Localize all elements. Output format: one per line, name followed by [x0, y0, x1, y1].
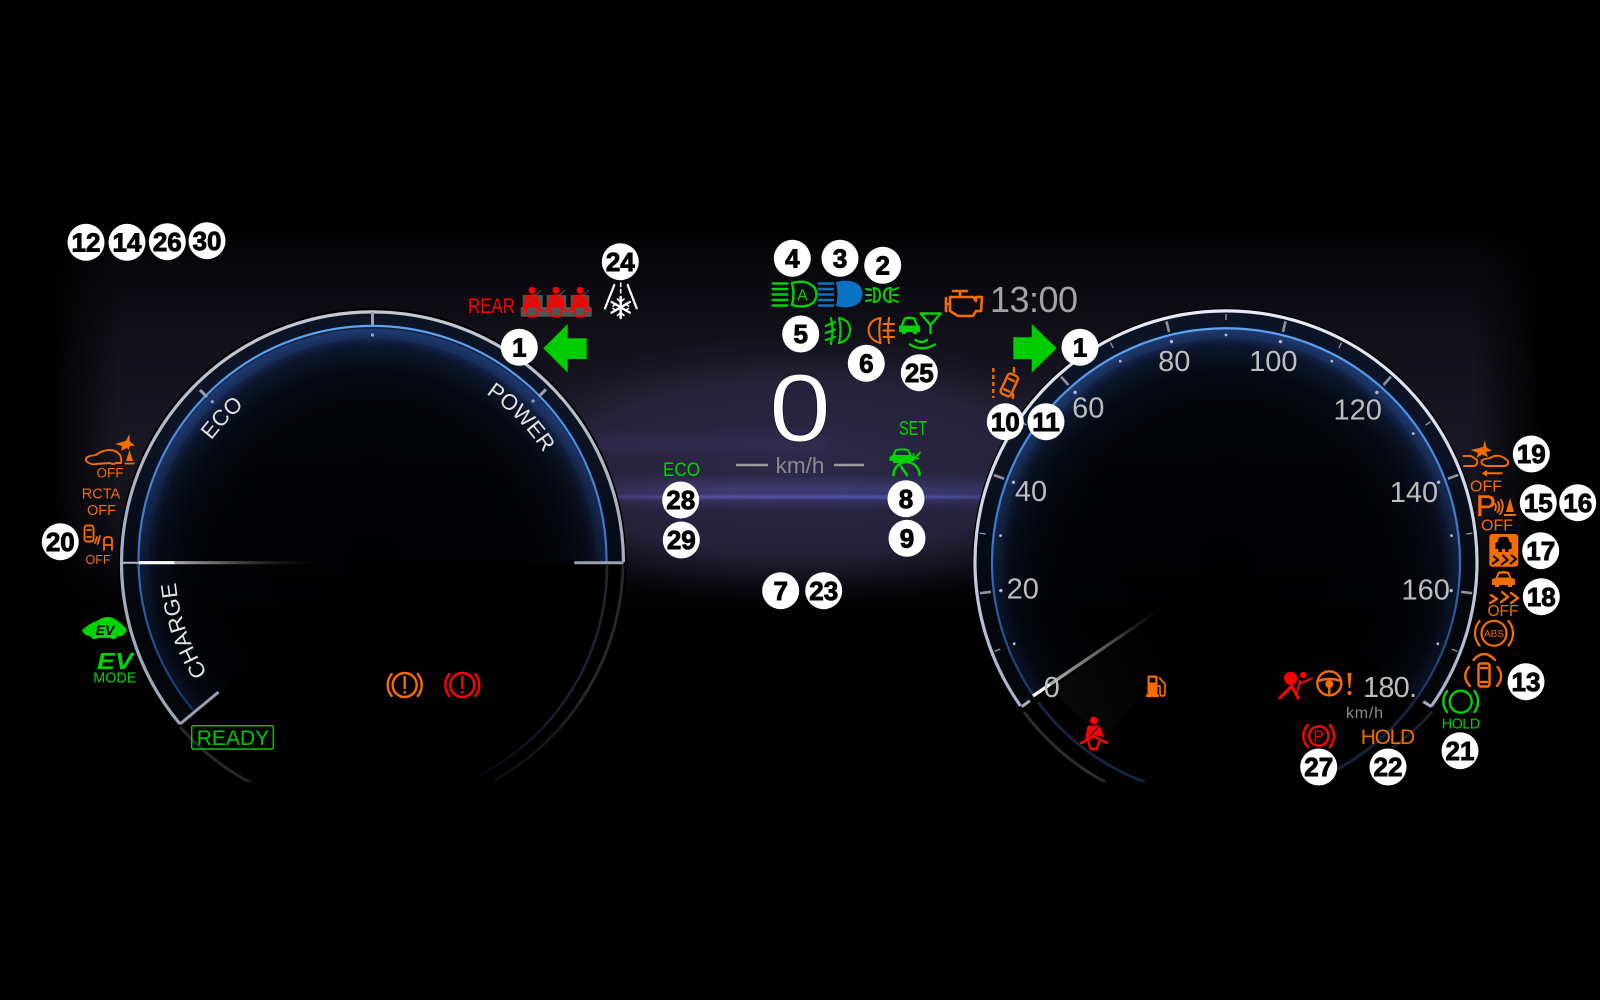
indicator: ECO mode: ECO	[663, 460, 700, 481]
minor ticks	[980, 314, 1472, 651]
icon: car link antenna	[899, 314, 940, 348]
icon: traction control off	[1488, 571, 1518, 620]
icon: auto high beam	[773, 282, 816, 306]
indicator: RCTA OFF: OFF	[87, 503, 116, 519]
icon: lane departure	[993, 368, 1019, 398]
icon: parking sensor off: P	[1476, 490, 1496, 523]
icon: rear cross traffic off	[84, 526, 112, 567]
speed scale numbers: 180.	[1363, 672, 1417, 704]
icon: driver seatbelt	[1081, 717, 1107, 749]
indicator: RCTA OFF	[82, 486, 121, 519]
icon: check engine	[946, 291, 982, 316]
callout badges: 12	[72, 228, 100, 258]
indicator: EV MODE: EV	[97, 648, 135, 674]
right gauge blue ring	[992, 328, 1460, 696]
icon: pre-collision off (right): OFF	[1470, 479, 1502, 496]
callout badges: 15	[1524, 488, 1553, 518]
right speed gauge	[970, 308, 1480, 816]
callout badges: 13	[1512, 667, 1540, 697]
icon: traction control off: OFF	[1488, 603, 1518, 620]
icon: rear fog light	[868, 318, 894, 343]
left gauge needle	[121, 562, 320, 564]
digital speed: 0	[769, 355, 831, 462]
icon: front fog light	[826, 318, 850, 344]
callout badges: 1	[512, 332, 527, 362]
icon: parking brake: P	[1314, 728, 1324, 746]
speed scale numbers: 20	[1007, 573, 1039, 605]
callout badges: 9	[900, 524, 914, 554]
left gauge outer ring	[122, 312, 623, 724]
icon: side lights	[866, 288, 898, 302]
speed scale numbers: 80	[1158, 346, 1190, 378]
callout badges: 23	[809, 576, 838, 606]
icon: skid warning	[1489, 534, 1518, 567]
left gauge lower dim arcs	[180, 565, 623, 785]
speed needle	[1033, 606, 1165, 696]
icon: auto high beam: A	[797, 288, 808, 304]
icon: pre-collision off (right)	[1464, 440, 1508, 496]
label: CHARGE: CHARGE	[160, 583, 204, 678]
callout badges: 28	[666, 485, 695, 515]
speed scale numbers: 160	[1402, 574, 1450, 606]
callout badges: 16	[1563, 488, 1592, 518]
speed unit: km/h	[776, 453, 824, 478]
callout badges: 30	[193, 226, 221, 256]
label: ECO: ECO	[200, 398, 240, 439]
icon: pre-collision off (left)	[86, 434, 135, 480]
callout badges: 4	[785, 244, 800, 274]
label: POWER: POWER	[488, 382, 554, 452]
icon: blind spot	[1465, 654, 1501, 686]
needle shadow wedge	[1050, 606, 1175, 740]
icon: high beam	[818, 281, 862, 307]
callout badges: 1	[1073, 332, 1087, 362]
speed scale numbers: 100	[1249, 346, 1297, 378]
clock: 13:00	[990, 279, 1078, 320]
callout badges: 5	[793, 319, 808, 349]
icon: brake hold green: HOLD	[1442, 716, 1480, 732]
icon: EV indicator	[82, 617, 127, 639]
icon: airbag	[1280, 672, 1312, 698]
icon: brake warning amber	[388, 673, 422, 697]
icon: parking sensor off	[1476, 490, 1516, 534]
speed scale numbers: 140	[1390, 477, 1438, 509]
callout badges: 26	[153, 227, 182, 257]
callout badges: 2	[875, 250, 890, 280]
scale dots	[999, 334, 1453, 646]
callout badges: 14	[113, 228, 142, 258]
icon: ABS: ABS	[1484, 629, 1504, 640]
icon: pre-collision off (left): OFF	[96, 466, 124, 480]
right gauge end ticks	[1022, 701, 1432, 707]
km/h scale unit: km/h	[1346, 705, 1383, 722]
callout badges: 25	[905, 358, 934, 388]
indicator: EV MODE: MODE	[93, 670, 136, 686]
icon: ABS	[1475, 621, 1513, 646]
speed scale numbers: 60	[1072, 392, 1104, 424]
speed scale numbers	[1007, 346, 1450, 704]
callout badges: 22	[1374, 752, 1402, 782]
turn arrow right	[1013, 324, 1057, 373]
rear seatbelt warning: REAR	[468, 295, 515, 318]
icon: adaptive cruise	[890, 448, 920, 475]
callout badges: 10	[991, 407, 1020, 437]
icon: icy road	[605, 283, 637, 318]
indicator: EV MODE	[93, 648, 136, 686]
turn arrow left	[543, 324, 587, 373]
callout badges: 3	[833, 244, 847, 274]
digital speed	[736, 355, 864, 478]
icon: parking brake	[1303, 725, 1334, 747]
indicator: RCTA OFF: RCTA	[82, 486, 121, 502]
speed scale numbers: 40	[1015, 476, 1047, 508]
callout badges: 17	[1526, 536, 1555, 566]
speed scale numbers: 120	[1334, 394, 1382, 426]
right gauge lower dim arcs	[1024, 696, 1432, 782]
callout badges: 21	[1446, 736, 1474, 766]
callout badges: 27	[1304, 752, 1333, 782]
left power gauge	[118, 308, 626, 782]
left gauge blue ring	[139, 326, 607, 710]
icon: brake warning red	[445, 673, 479, 697]
icon: rear cross traffic off: OFF	[86, 553, 111, 567]
callout badges: 6	[859, 348, 874, 378]
right gauge outer ring	[975, 311, 1477, 706]
callout badges: 8	[899, 484, 913, 514]
left gauge dots	[211, 333, 535, 403]
callout badges: 29	[667, 525, 696, 555]
icon: fuel	[1146, 676, 1165, 697]
indicator: READY: READY	[197, 727, 269, 750]
callout badges: 11	[1032, 407, 1060, 437]
callout badges: 20	[46, 527, 75, 557]
callout badges: 18	[1527, 582, 1556, 612]
indicator: HOLD amber: HOLD	[1361, 726, 1415, 749]
icon: brake hold green	[1442, 691, 1480, 732]
callout badges	[42, 222, 1596, 785]
speed scale numbers: 0	[1044, 672, 1060, 704]
icon: steering warning	[1317, 671, 1352, 695]
indicator: SET: SET	[899, 418, 927, 440]
icon: EV indicator: EV	[96, 622, 116, 638]
rear seatbelt warning	[468, 287, 592, 318]
icon: parking sensor off: OFF	[1481, 518, 1513, 534]
instrument cluster	[42, 222, 1596, 786]
major ticks	[980, 321, 1472, 593]
left gauge end ticks	[180, 312, 624, 724]
callout badges: 19	[1517, 439, 1546, 469]
callout badges: 24	[606, 247, 635, 277]
callout badges: 7	[773, 576, 788, 606]
